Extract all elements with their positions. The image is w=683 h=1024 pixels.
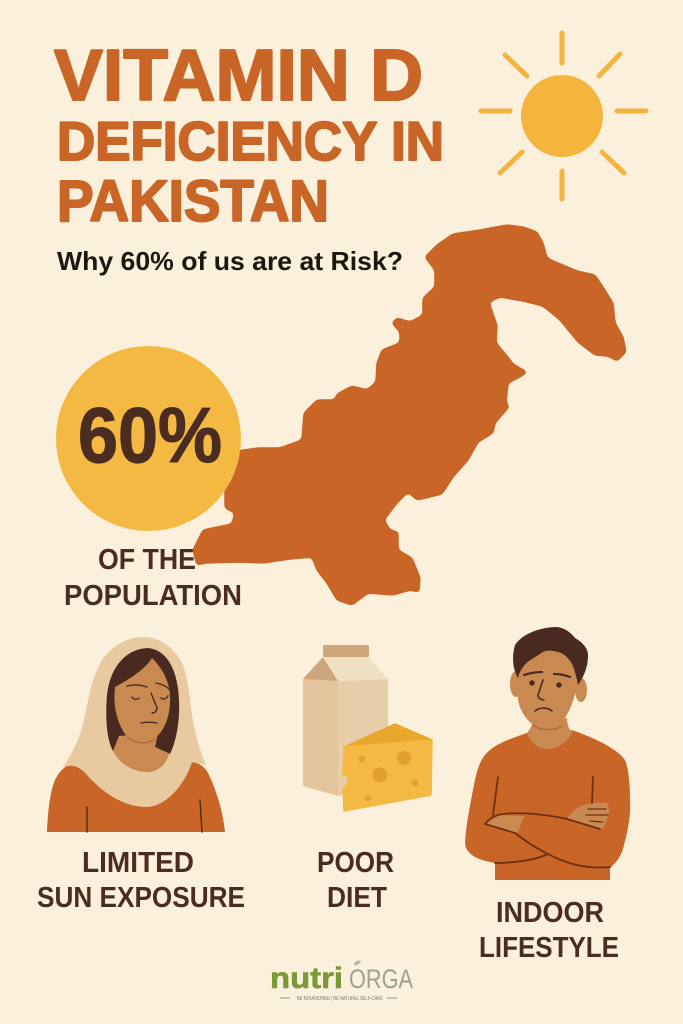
icon: woman in headscarf [47,637,225,832]
icon: milk carton and cheese [303,645,432,811]
label: poor diet: DIET [327,882,387,914]
sweater [465,730,630,880]
hair [513,627,588,685]
label: indoor lifestyle: LIFESTYLE [479,932,619,964]
neck [113,733,169,772]
stat label: of the population: POPULATION [64,580,242,612]
hair [106,648,179,754]
face [114,658,170,744]
icon: man with crossed arms [465,627,630,880]
title [54,36,444,234]
cheese wedge [344,724,432,747]
title: DEFICIENCY IN [57,110,444,172]
stat circle: 60%: 60% [78,391,222,479]
label: limited sun exposure [37,847,245,914]
icon: sun [481,33,646,199]
label: indoor lifestyle: INDOOR [496,897,604,929]
label: limited sun exposure: SUN EXPOSURE [37,882,245,914]
face [518,645,577,729]
title: PAKISTAN [57,169,329,234]
hands [485,815,525,833]
logo: nutriORGA: BE NOURISHING | BE NATURAL SELF-CARE [297,996,384,1002]
label: indoor lifestyle [479,897,619,964]
label: limited sun exposure: LIMITED [82,847,194,879]
title: VITAMIN D [54,36,423,116]
map of Pakistan [193,225,626,605]
stat circle: 60% [56,346,241,531]
label: poor diet [317,847,394,914]
logo: nutriORGA [270,961,413,1002]
logo: nutriORGA: nutri [270,962,343,995]
headscarf [63,637,206,807]
label: poor diet: POOR [317,847,394,879]
milk carton [303,679,338,796]
ears [510,671,522,697]
dress [47,762,225,832]
logo: nutriORGA: ORGA [349,964,413,994]
neck [527,718,572,749]
stat label: of the population [64,544,242,612]
face features [524,672,570,711]
stat label: of the population: OF THE [98,544,196,576]
subtitle: Why 60% of us are at Risk? [57,246,403,276]
face features [87,683,202,832]
arm lines [485,777,610,868]
